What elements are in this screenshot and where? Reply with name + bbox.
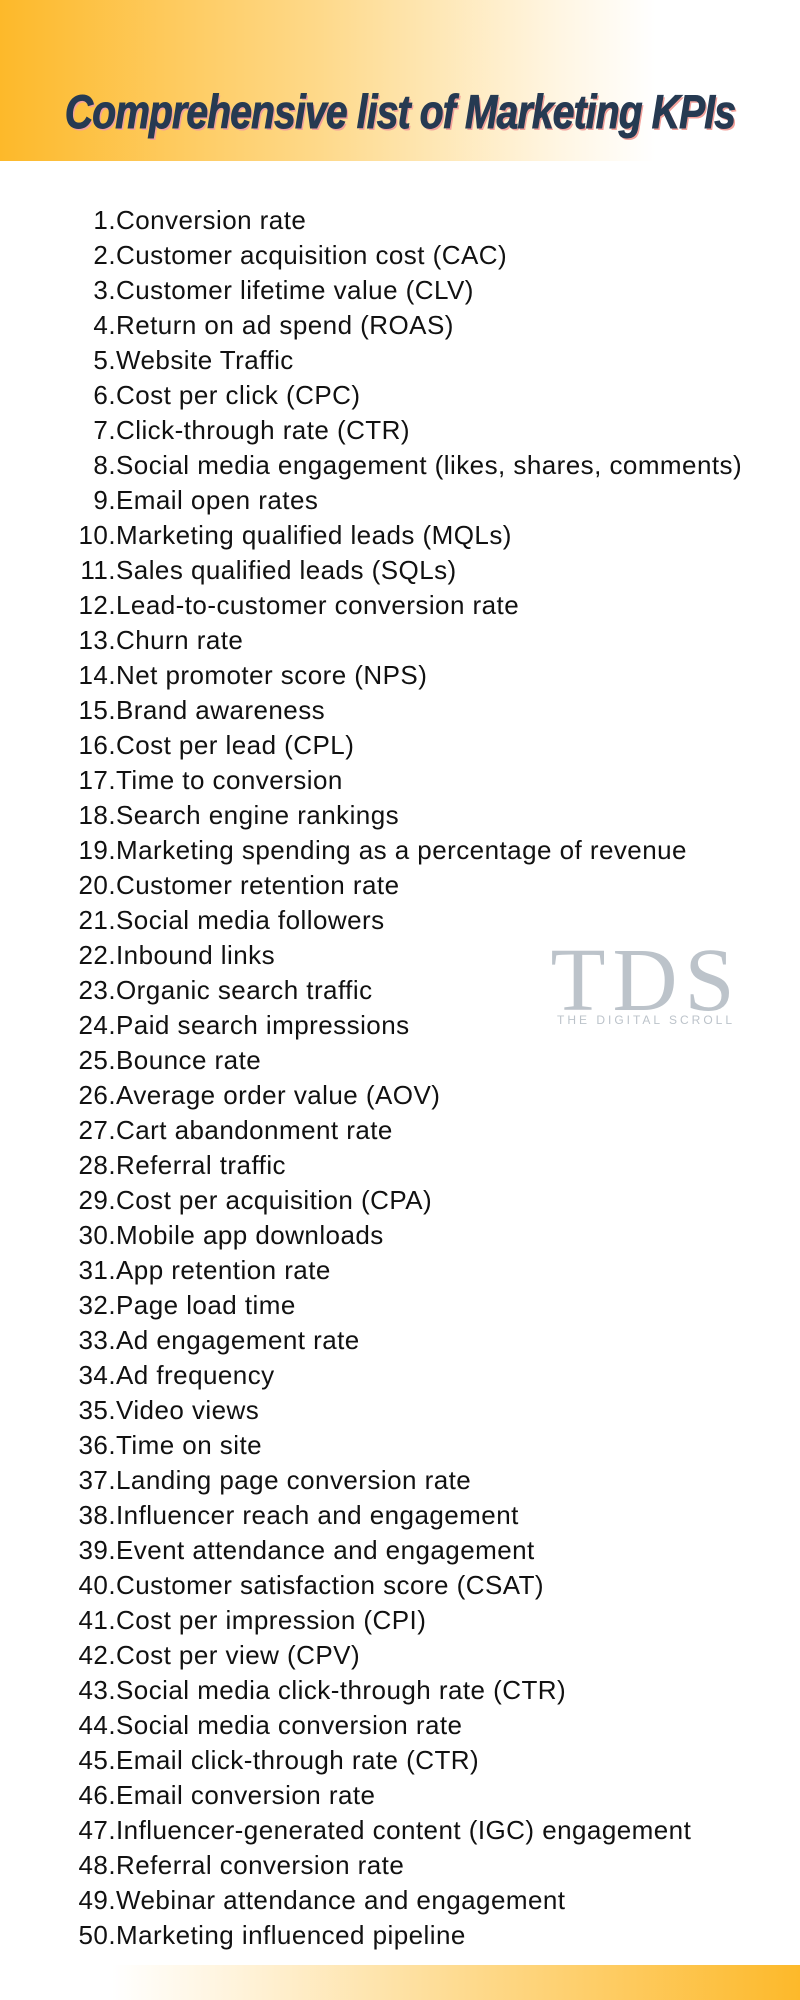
KPI list: 20. [78,870,116,900]
KPI list: 10. [78,520,116,550]
KPI list: Bounce rate [116,1045,261,1075]
KPI list: 40. [78,1570,116,1600]
KPI list: Marketing qualified leads (MQLs) [116,520,512,550]
KPI list: 49. [78,1885,116,1915]
KPI list: 48. [78,1850,116,1880]
header band [0,0,800,161]
KPI list: Ad frequency [116,1360,275,1390]
title: Comprehensive list of Marketing KPIs [65,85,735,138]
KPI list: Brand awareness [116,695,325,725]
KPI list: Customer retention rate [116,870,399,900]
KPI list: Cost per view (CPV) [116,1640,360,1670]
KPI list: Website Traffic [116,345,294,375]
KPI list: Email conversion rate [116,1780,375,1810]
KPI list: 31. [78,1255,116,1285]
KPI list: 41. [78,1605,116,1635]
KPI list: 3. [93,275,116,305]
KPI list: Average order value (AOV) [116,1080,440,1110]
KPI list: Email click-through rate (CTR) [116,1745,479,1775]
KPI list: 38. [78,1500,116,1530]
KPI list: Email open rates [116,485,318,515]
KPI list: 43. [78,1675,116,1705]
KPI list: 8. [93,450,116,480]
KPI list: Social media conversion rate [116,1710,462,1740]
KPI list: 2. [93,240,116,270]
KPI list: 19. [78,835,116,865]
KPI list: Social media engagement (likes, shares, comments) [116,450,742,480]
KPI list: Influencer reach and engagement [116,1500,519,1530]
KPI list: 21. [78,905,116,935]
KPI list: Customer acquisition cost (CAC) [116,240,507,270]
KPI list: Time to conversion [116,765,343,795]
KPI list: Social media click-through rate (CTR) [116,1675,566,1705]
KPI list: 39. [78,1535,116,1565]
KPI list: 46. [78,1780,116,1810]
logo: TDS The Digital Scroll: THE DIGITAL SCROLL [557,1013,735,1027]
KPI list: 12. [78,590,116,620]
KPI list: Influencer-generated content (IGC) engagement [116,1815,691,1845]
KPI list: 13. [78,625,116,655]
KPI list: Lead-to-customer conversion rate [116,590,519,620]
KPI list: Referral conversion rate [116,1850,404,1880]
KPI list: 36. [78,1430,116,1460]
KPI list: 23. [78,975,116,1005]
KPI list: 4. [93,310,116,340]
KPI list: Social media followers [116,905,385,935]
KPI list: Churn rate [116,625,243,655]
KPI list: Organic search traffic [116,975,373,1005]
KPI list: Referral traffic [116,1150,286,1180]
KPI list: 34. [78,1360,116,1390]
KPI list: Cost per impression (CPI) [116,1605,426,1635]
KPI list: 14. [78,660,116,690]
KPI list: Mobile app downloads [116,1220,384,1250]
KPI list: 47. [78,1815,116,1845]
KPI list: 5. [93,345,116,375]
KPI list: 37. [78,1465,116,1495]
KPI list: Inbound links [116,940,275,970]
KPI list: 15. [78,695,116,725]
KPI list: 16. [78,730,116,760]
KPI list: Return on ad spend (ROAS) [116,310,454,340]
KPI list: Cost per acquisition (CPA) [116,1185,432,1215]
KPI list: Conversion rate [116,205,306,235]
KPI list: 24. [78,1010,116,1040]
KPI list: Cost per lead (CPL) [116,730,354,760]
KPI list: 6. [93,380,116,410]
KPI list: 32. [78,1290,116,1320]
KPI list: 27. [78,1115,116,1145]
KPI list: Time on site [116,1430,262,1460]
KPI list: Paid search impressions [116,1010,410,1040]
KPI list: 26. [78,1080,116,1110]
KPI list: 45. [78,1745,116,1775]
KPI list: Page load time [116,1290,296,1320]
KPI list: Customer lifetime value (CLV) [116,275,474,305]
KPI list: 30. [78,1220,116,1250]
KPI list: Net promoter score (NPS) [116,660,427,690]
KPI list: 29. [78,1185,116,1215]
KPI list: App retention rate [116,1255,331,1285]
logo: TDS The Digital Scroll: TDS [550,931,742,1030]
KPI list: 1. [93,205,116,235]
KPI list: 11. [80,555,116,585]
KPI list: Cart abandonment rate [116,1115,393,1145]
KPI list: Customer satisfaction score (CSAT) [116,1570,544,1600]
KPI list: Click-through rate (CTR) [116,415,410,445]
KPI list: 25. [78,1045,116,1075]
KPI list: Ad engagement rate [116,1325,360,1355]
KPI list: Search engine rankings [116,800,399,830]
KPI list: 35. [78,1395,116,1425]
KPI list: 17. [78,765,116,795]
KPI list: 50. [78,1920,116,1950]
KPI list: 28. [78,1150,116,1180]
KPI list: 33. [78,1325,116,1355]
KPI list: Sales qualified leads (SQLs) [116,555,457,585]
KPI list: Landing page conversion rate [116,1465,471,1495]
KPI list: Event attendance and engagement [116,1535,535,1565]
KPI list: Cost per click (CPC) [116,380,360,410]
KPI list: 44. [78,1710,116,1740]
KPI list: 42. [78,1640,116,1670]
footer band [0,1965,800,2000]
KPI list: 22. [78,940,116,970]
KPI list: Webinar attendance and engagement [116,1885,565,1915]
KPI list: 9. [93,485,116,515]
KPI list: 18. [78,800,116,830]
KPI list: Marketing influenced pipeline [116,1920,466,1950]
KPI list: Marketing spending as a percentage of revenue [116,835,687,865]
KPI list: Video views [116,1395,259,1425]
KPI list: 7. [93,415,116,445]
